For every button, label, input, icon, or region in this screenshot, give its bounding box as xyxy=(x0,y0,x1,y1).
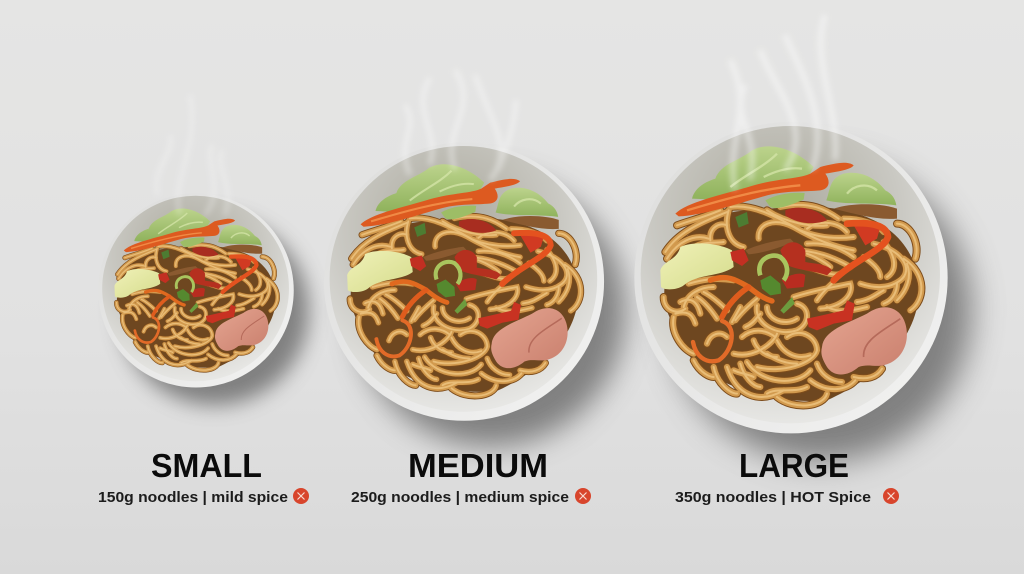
small bowl xyxy=(98,95,309,405)
heading: small: SMALL xyxy=(151,447,262,484)
medium bowl xyxy=(324,70,626,446)
steam: large bowl xyxy=(730,15,836,190)
heading: large: LARGE xyxy=(739,447,849,484)
heading: medium: MEDIUM xyxy=(408,447,548,484)
label: small xyxy=(98,447,309,506)
icon: spice marker medium xyxy=(575,488,591,504)
detail: large: 350g noodles | HOT Spice xyxy=(675,489,871,506)
label: large xyxy=(675,447,899,506)
detail: small: 150g noodles | mild spice xyxy=(98,489,288,506)
icon: spice marker small xyxy=(293,488,309,504)
label: medium xyxy=(351,447,591,506)
icon: spice marker large xyxy=(883,488,899,504)
steam: medium bowl xyxy=(405,70,516,180)
steam: small bowl xyxy=(156,95,228,215)
large bowl xyxy=(634,15,972,462)
detail: medium: 250g noodles | medium spice xyxy=(351,489,569,506)
